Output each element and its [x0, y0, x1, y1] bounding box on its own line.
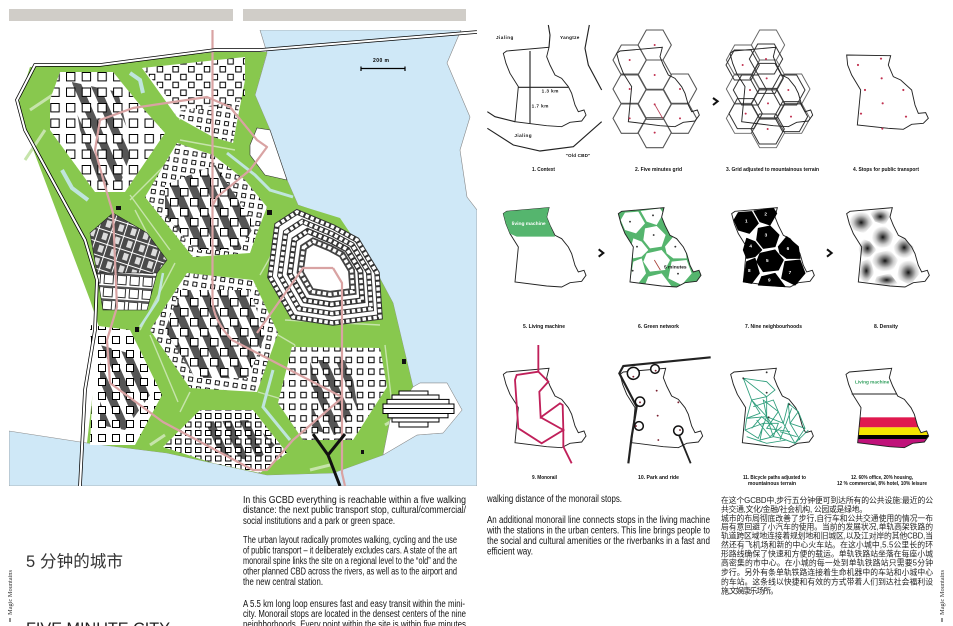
green land	[18, 52, 413, 475]
english text column 1: city. Monorail stops are located in the densest centers of the nine	[243, 609, 466, 620]
highway	[17, 32, 477, 486]
diagram 7: nine neighbourhoods: 9	[768, 277, 771, 282]
diagram 1: context: Jialing	[496, 35, 513, 40]
chinese text column: 步行。另外有条单轨铁路连接着生命机器中的车站和小城中心	[721, 567, 933, 577]
english text column 1: other planned CBD across the rivers, as well as to the airport and	[243, 566, 457, 578]
peninsula with striped building	[383, 383, 462, 455]
diagram 4: stops for public transport	[847, 55, 928, 130]
diagram 12: programme mix	[843, 368, 936, 449]
neighbourhood: contour terraces	[270, 212, 380, 323]
scale bar	[361, 58, 405, 71]
diagram 1: context: 1.7 km	[532, 104, 548, 109]
captions row 3	[532, 475, 927, 487]
captions row 1: 4. Stops for public transport	[853, 167, 919, 173]
english text column 2: the social and cultural amenities or the riverbanks in a fast and	[487, 536, 710, 547]
english text column 1: the new central station.	[243, 577, 323, 588]
english text column 2: efficient way.	[487, 546, 533, 558]
header bar: left	[9, 9, 233, 21]
chinese text column: 高密集的市中心。在小城的每一处到单轨铁路站只需要5分钟	[721, 558, 933, 568]
diagram row 2	[503, 208, 929, 287]
neighbourhood 3: centre north	[145, 143, 267, 257]
diagram 7: nine neighbourhoods: 5	[766, 258, 769, 263]
old town grid	[90, 213, 167, 310]
captions row 1: 2. Five minutes grid	[635, 167, 682, 173]
diagram 6: green network: 5 minutes	[664, 265, 687, 270]
chinese text column: 局有意回避了小汽车的使用。当前的发展状况,单轨高架铁路的	[721, 522, 933, 532]
chinese text column: 形路线确保了快速和方便的载运。单轨铁路站坐落在每座小城	[721, 548, 933, 558]
english text column 2: with the stations in the urban centers. This line brings people to	[486, 526, 710, 536]
captions row 2	[523, 324, 899, 330]
english text column 2: An additional monorail line connects stops in the living machine	[487, 515, 710, 526]
neighbourhood 8: southwest	[90, 325, 162, 445]
diagram 2: five minutes grid	[613, 30, 699, 148]
english text column 1: social institutions and a park or green space.	[243, 516, 395, 527]
chinese text column: 的车站。这条线以快捷和有效的方式带着人们到达社会福利设	[721, 576, 933, 586]
english text column 1: monorail spine links the site on a regional level to the “old” and the	[243, 556, 457, 567]
captions row 3: 10. Park and ride	[638, 475, 679, 481]
east bank wedge	[250, 128, 287, 180]
captions row 3: 12 % commercial, 8% hotel, 10% leisure	[837, 481, 927, 487]
monorail lines	[95, 30, 345, 486]
english text column 1: distance: the next public transport stop, cultural/commercial/	[243, 505, 466, 516]
chinese text column: 共交通,文化/金融/社会机构, 公园或是绿地。	[721, 504, 867, 514]
captions row 2: 6. Green network	[638, 324, 680, 330]
neighbourhood 5: central	[150, 273, 278, 392]
captions row 3: 9. Monorail	[532, 475, 557, 481]
diagram 12: programme mix: Living machine	[855, 380, 890, 385]
neighbourhood 2: north	[142, 57, 245, 143]
captions row 2: 8. Density	[874, 324, 899, 330]
english text column 2	[486, 494, 710, 558]
chinese text column: 城市的布局彻底改善了步行,自行车和公共交通使用的情况一布	[721, 513, 933, 523]
title: Chinese: 5 分钟的城市	[26, 552, 123, 571]
neighbourhood 1: northwest	[50, 72, 165, 192]
diagram 9: monorail	[503, 345, 586, 463]
scale bar: 200 m	[373, 58, 390, 64]
captions row 2: 5. Living machine	[523, 324, 565, 330]
diagram 1: context: Jialing	[514, 133, 532, 138]
diagram 8: density	[847, 208, 929, 287]
chinese text column: 施,文娱康乐场所。	[721, 586, 778, 596]
diagram 1: context	[487, 25, 602, 158]
diagram 5: living machine: living machine	[512, 221, 546, 227]
captions row 1: 1. Context	[532, 167, 555, 173]
arrow: grid to adjusted grid	[713, 98, 718, 105]
diagram 11: bicycle paths	[731, 368, 813, 448]
diagram 7: nine neighbourhoods	[732, 208, 814, 287]
diagram 7: nine neighbourhoods: 8	[748, 268, 751, 273]
captions row 1: 3. Grid adjusted to mountainous terrain	[726, 167, 820, 173]
header bar: right	[243, 9, 466, 21]
river	[9, 30, 477, 486]
captions row 3: mountainous terrain	[748, 481, 797, 487]
diagram 5: living machine	[503, 208, 586, 287]
english text column 1	[243, 495, 466, 626]
diagram 7: nine neighbourhoods: 4	[749, 243, 752, 248]
captions row 1	[532, 167, 919, 173]
english text column 1: In this GCBD everything is reachable within a five walking	[243, 495, 466, 506]
diagram 3: adjusted grid	[726, 30, 813, 148]
english text column 2: walking distance of the monorail stops.	[486, 494, 622, 505]
stop markers	[116, 206, 406, 454]
diagram 1: context: Yangtze	[560, 35, 580, 40]
diagram 7: nine neighbourhoods: 3	[765, 233, 768, 238]
neighbourhood 7: southeast	[278, 347, 387, 440]
captions row 3: 11. Bicycle paths adjusted to	[743, 475, 807, 481]
diagram 7: nine neighbourhoods: 1	[745, 218, 748, 223]
diagram 6: green network	[618, 208, 701, 287]
captions row 2: 7. Nine neighbourhoods	[745, 324, 802, 330]
master plan map	[9, 30, 477, 486]
chinese text column	[721, 495, 933, 596]
captions row 3: 12. 60% office, 20% housing,	[851, 475, 913, 481]
vertical credit: right: Magic Mountains	[939, 570, 946, 615]
english text column 1: A 5.5 km long loop ensures fast and easy transit within the mini-	[243, 599, 465, 610]
diagram 7: nine neighbourhoods: 2	[764, 212, 767, 217]
arrow: living machine to green network	[599, 249, 603, 257]
diagram 1: context: "Old CBD"	[566, 153, 590, 158]
arrow: neighbourhoods to density	[827, 249, 832, 257]
neighbourhood 9: south	[163, 410, 287, 473]
vertical credit: left: Magic Mountains	[7, 570, 14, 615]
english text column 1: of public transport – it deliberately excludes cars. A state of the art	[243, 546, 457, 556]
chinese text column: 然还有飞机场和新的中心火车站。在这小城中,5.5公里长的环	[721, 540, 933, 550]
chinese text column: 轨道跨区域地连接着规划地和旧城区,以及江对岸的其他CBD,当	[721, 530, 933, 540]
diagram 10: park and ride	[619, 357, 711, 463]
diagram row 1	[487, 25, 928, 158]
english text column 1: The urban layout radically promotes walking, cycling and the use	[243, 535, 457, 546]
chinese text column: 在这个GCBD中,步行五分钟便可到达所有的公共设施:最近的公	[721, 495, 933, 505]
diagram 1: context: 1.3 km	[542, 89, 558, 94]
diagram 7: nine neighbourhoods: 7	[789, 270, 792, 275]
light green paths and ponds	[25, 73, 410, 470]
diagram 7: nine neighbourhoods: 6	[787, 246, 790, 251]
diagram row 3	[503, 345, 936, 463]
